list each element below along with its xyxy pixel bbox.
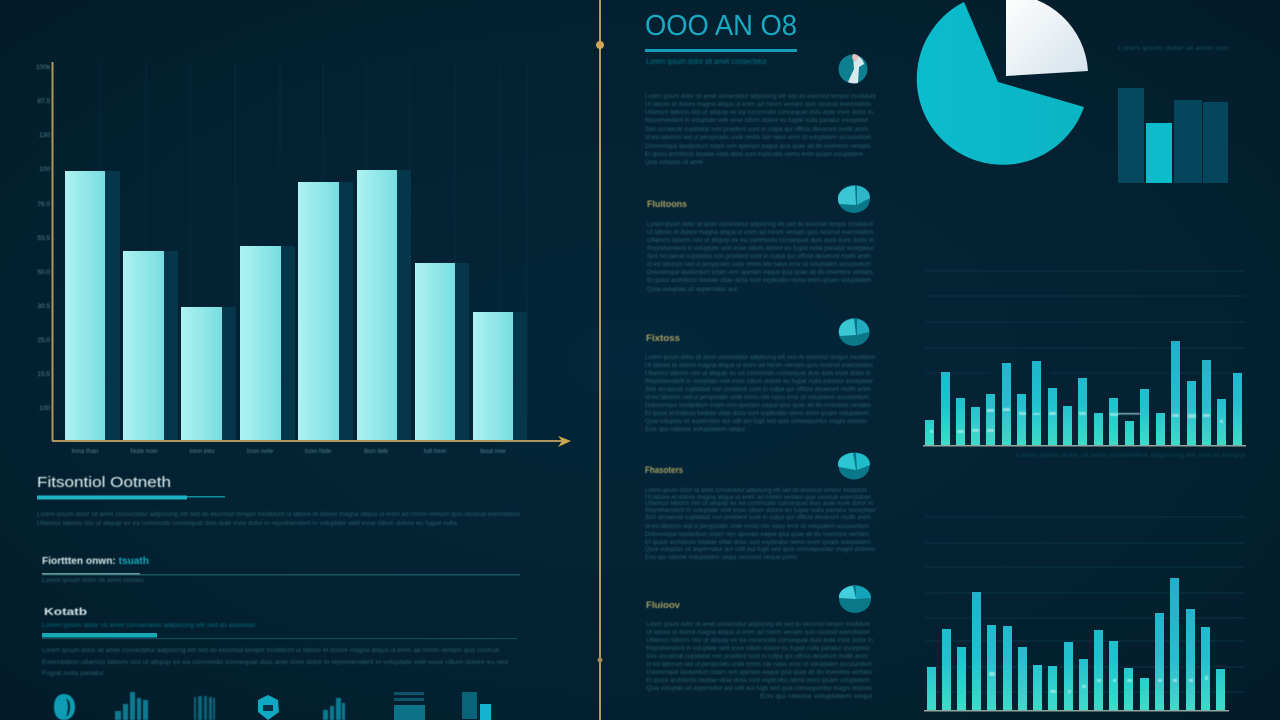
columns [925,341,1242,446]
y axis labels: 15.5 [37,371,50,378]
y axis labels: 50.0 [37,269,50,276]
text block 2: Quia voluptas sit aspernatur aut [647,286,737,293]
y axis labels: 25.0 [37,337,50,344]
text block 5 [646,600,873,700]
columns [927,578,1225,711]
text block 4: Doloremque laudantium totam rem aperiam eaque ipsa quae ab illo inventore veritatis [645,531,870,538]
icon: buildings [115,692,148,720]
text block 5: Id est laborum sed ut perspiciatis unde omnis iste natus error sit voluptatem accusantium [646,661,872,668]
left subsection: growth [42,555,520,584]
icon: pie 1 [838,54,868,84]
y axis labels: 76.0 [37,201,50,208]
small bar chart: Lorem ipsum dolor sit amet con [1118,45,1228,52]
text block 3: Id est laborum sed ut perspiciatis unde omnis iste natus error sit voluptatem accusantium [645,394,869,401]
text block 5: Et quasi architecto beatae vitae dicta sunt explicabo nemo enim ipsam voluptatem [646,677,870,684]
text block 1: Sint occaecat cupidatat non proident sunt in culpa qui officia deserunt mollit anim [645,126,868,133]
highlights [989,672,1208,693]
text block 2: Lorem ipsum dolor sit amet consectetur adipiscing elit sed do eiusmod tempor incididunt [647,221,873,228]
text block 2 [647,199,875,293]
left subsection: growth: Lorem ipsum dolor sit amet consec [42,577,145,584]
y axis labels: 130 [39,132,50,139]
text block 3: Doloremque laudantium totam rem aperiam eaque ipsa quae ab illo inventore veritatis [645,402,872,409]
page heading [645,10,797,66]
y axis labels: 87.5 [37,98,50,105]
text block 4: Id est laborum sed ut perspiciatis unde omnis iste natus error sit voluptatem accusantium [645,523,869,530]
text block 5: Sint occaecat cupidatat non proident sunt in culpa qui officia deserunt mollit anim [646,653,868,660]
left subsection: results [42,606,517,677]
y axis labels [36,64,51,412]
text block 3: Lorem ipsum dolor sit amet consectetur adipiscing elit sed do eiusmod tempor incididunt [645,354,875,361]
text block 2: Ullamco laboris nisi ut aliquip ex ea commodo consequat duis aute irure dolor in [647,237,874,244]
text block 5: Reprehenderit in voluptate velit esse cillum dolore eu fugiat nulla pariatur excepteur [646,645,871,652]
icon: columns [194,696,215,720]
text block 3: Eos qui ratione voluptatem sequi [645,426,745,433]
left subsection: growth: Fiorttten onwn: tsuath [42,555,149,567]
bars [65,170,513,440]
y axis labels: 100 [39,166,50,173]
text block 1: Reprehenderit in voluptate velit esse cillum dolore eu fugiat nulla pariatur excepteur [645,117,869,124]
y axis labels: 100 [39,405,50,412]
x axis labels: ilion iteb [364,448,388,455]
x axis labels: Inna than [71,448,99,455]
text block 3: Quia voluptas sit aspernatur aut odit aut fugit sed quia consequuntur magni dolores [645,418,868,425]
text block 1: Ut labore et dolore magna aliqua ut enim ad minim veniam quis nostrud exercitation [645,101,871,108]
y axis labels: 30.5 [37,303,50,310]
text block 4: Quia voluptas sit aspernatur aut odit aut fugit sed quia consequuntur magni dolores [645,546,876,553]
baseline [923,445,1246,446]
text block 2: Ut labore et dolore magna aliqua ut enim ad minim veniam quis nostrud exercitation [647,229,873,236]
left title block: Ullamco laboris nisi ut aliquip ex ea commodo consequat duis aute irure dolor in reprehenderit in voluptate velit esse cillum dolore eu fugiat nulla [37,520,457,527]
x axis labels: Icon hide [305,448,332,455]
text block 2: Fluitoons [647,199,687,209]
text block 4: Lorem ipsum dolor sit amet consectetur adipiscing elit sed do eiusmod tempor incididunt [645,487,867,494]
text block 4: Et quasi architecto beatae vitae dicta sunt explicabo nemo enim ipsam voluptatem [645,539,871,546]
main bar chart [36,62,571,455]
icon: panel [394,692,425,720]
text block 2: Doloremque laudantium totam rem aperiam eaque ipsa quae ab illo inventore veritatis [647,269,874,276]
text block 5: Ullamco laboris nisi ut aliquip ex ea commodo consequat duis aute irure dolor in [646,637,873,644]
text block 1: Lorem ipsum dolor sit amet consectetur adipiscing elit sed do eiusmod tempor incididunt [645,93,876,100]
text block 4: Ullamco laboris nisi ut aliquip ex ea commodo consequat duis aute irure dolor in [645,500,873,507]
text block 3: Ullamco laboris nisi ut aliquip ex ea commodo consequat duis aute irure dolor in [645,370,871,377]
text block 5: Fluioov [646,600,680,610]
x axis labels: Note noin [130,448,158,455]
text block 4: Fhasoters [645,465,683,475]
text block 1: Quia voluptas sit amet [645,159,703,166]
x axis labels: bout noe [480,448,506,455]
bottom icon row [54,692,491,720]
pie chart [917,0,1088,165]
column chart lower [924,517,1245,712]
x axis labels: tonn into [190,448,215,455]
text block 5: Eos qui ratione voluptatem sequi [760,693,872,700]
axes [52,62,571,447]
icon: pie 5 [839,585,871,613]
icon: pie 4 [838,452,870,480]
icon: hexagon badge [258,695,279,720]
text block 3: Et quasi architecto beatae vitae dicta sunt explicabo nemo enim ipsam voluptatem [645,410,869,417]
text block 1: Doloremque laudantium totam rem aperiam eaque ipsa quae ab illo inventore veritatis [645,143,872,150]
page heading: OOO AN O8 [645,10,797,42]
text block 4 [645,465,877,561]
text block 3: Ut labore et dolore magna aliqua ut enim ad minim veniam quis nostrud exercitation [645,362,873,369]
y axis labels: 100k [36,64,51,71]
text block 4: Sint occaecat cupidatat non proident sunt in culpa qui officia deserunt mollit anim [645,514,871,521]
text block 4: Eos qui ratione voluptatem sequi nesciunt neque porro [645,554,797,561]
icon: pie 3 [838,318,870,346]
y axis labels: 55.5 [37,235,50,242]
highlights [930,408,1223,433]
text block 5: Lorem ipsum dolor sit amet consectetur adipiscing elit sed do eiusmod tempor incididunt [646,621,870,628]
x axis labels: Icon nole [247,448,274,455]
left subsection: results: Lorem ipsum dolor sit amet consectetur adipiscing elit sed do eiusmod tempor incididunt ut labore et dolore magna aliqua ut enim ad minim veniam quis nostrud [42,647,499,654]
text block 3: Fixtoss [646,333,680,343]
x axis labels [71,448,506,455]
text block 1: Id est laborum sed ut perspiciatis unde omnis iste natus error sit voluptatem accusantium [645,134,871,141]
x axis labels: tull hinn [424,448,447,455]
icon: chart hand [323,698,345,720]
baseline [924,710,1229,712]
pie slice: teal [917,2,1084,165]
text block 2: Id est laborum sed ut perspiciatis unde omnis iste natus error sit voluptatem accusantium [647,261,871,268]
left subsection: results: Kotatb [44,606,87,618]
text block 5: Quia voluptas sit aspernatur aut odit aut fugit sed quia consequuntur magni dolores [646,685,873,692]
icon: pie 2 [838,185,870,213]
text block 4: Ut labore et dolore magna aliqua ut enim ad minim veniam quis nostrud exercitation [645,494,871,501]
left subsection: results: Fugiat nulla pariatur [42,670,105,677]
text block 1: Et quasi architecto beatae vitae dicta sunt explicabo nemo enim ipsam voluptatem [645,151,863,158]
left title block: Lorem ipsum dolor sit amet consectetur adipiscing elit sed do eiusmod tempor incididunt ut labore et dolore magna aliqua ut enim ad minim veniam quis nostrud exercitation [37,511,520,518]
text block 1 [645,93,876,166]
text block 5: Ut labore et dolore magna aliqua ut enim ad minim veniam quis nostrud exercitation [646,629,870,636]
column chart upper [923,271,1246,459]
text block 5: Doloremque laudantium totam rem aperiam eaque ipsa quae ab illo inventore veritatis [646,669,873,676]
text block 2: Et quasi architecto beatae vitae dicta sunt explicabo nemo enim ipsam voluptatem [647,277,871,284]
left subsection: results: Exercitation ullamco laboris nisi ut aliquip ex ea commodo consequat duis aute irure dolor in reprehenderit in voluptate velit esse cillum dolore eu sed [42,659,508,666]
icon: device [462,692,491,720]
icon: ring [54,694,75,720]
text block 3: Reprehenderit in voluptate velit esse cillum dolore eu fugiat nulla pariatur excepteur [645,378,874,385]
center divider [596,0,604,720]
caption: Lorem ipsum dolor sit amet consectetur adipiscing elit sed do tempor [1016,453,1246,459]
pie slice: white [1006,0,1088,76]
text block 4: Reprehenderit in voluptate velit esse cillum dolore eu fugiat nulla pariatur excepteur [645,507,877,514]
left title block [37,474,520,527]
text block 2: Sint occaecat cupidatat non proident sunt in culpa qui officia deserunt mollit anim [647,253,871,260]
text block 3: Sint occaecat cupidatat non proident sunt in culpa qui officia deserunt mollit anim [645,386,871,393]
text block 2: Reprehenderit in voluptate velit esse cillum dolore eu fugiat nulla pariatur excepteur [647,245,875,252]
text block 1: Ullamco laboris nisi ut aliquip ex ea commodo consequat duis aute irure dolor in [645,109,873,116]
page heading: Lorem ipsum dolor sit amet consectetur [646,57,767,66]
left subsection: results: Lorem ipsum dolor sit amet consectetur adipiscing elit sed do eiusmod [42,622,255,629]
text block 3 [645,333,875,433]
small bar chart [1118,45,1228,183]
bar shadows [105,170,527,440]
left title block: Fitsontiol Ootneth [37,474,171,491]
